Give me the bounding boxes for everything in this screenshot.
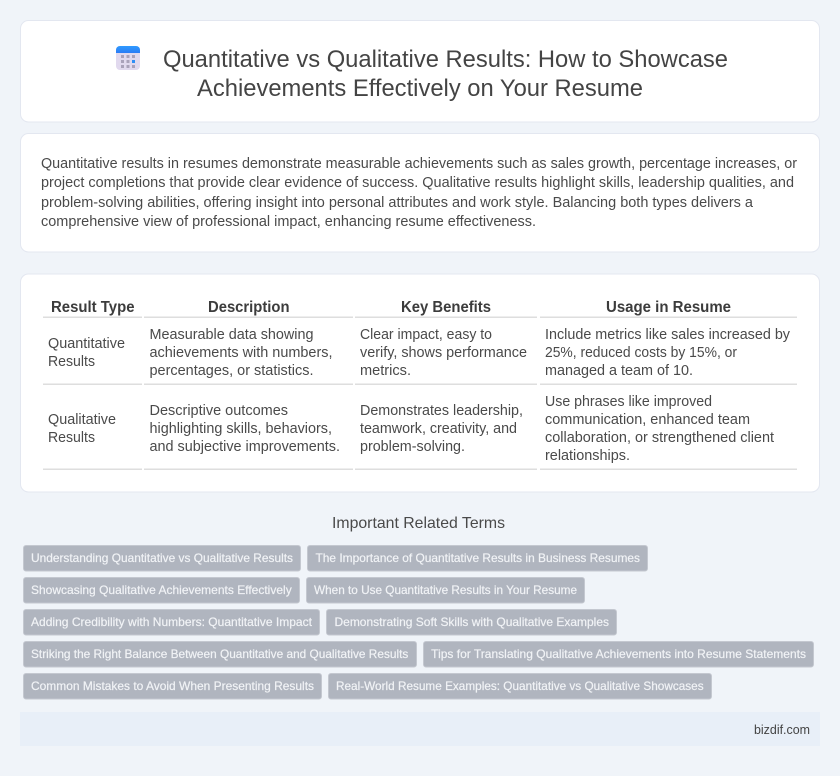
tag: The Importance of Quantitative Results in Business Resumes	[316, 551, 640, 565]
tag	[308, 546, 648, 571]
table row: quantitative results	[48, 327, 791, 379]
table row: quantitative results: Clear impact, easy to	[360, 327, 492, 343]
tag: Adding Credibility with Numbers: Quantitative Impact	[31, 615, 313, 629]
panel: introduction	[20, 134, 820, 252]
table row: qualitative results: problem-solving.	[360, 439, 465, 455]
table row: qualitative results: communication, enhanced team	[545, 412, 750, 428]
table row: quantitative results: metrics.	[360, 363, 411, 379]
table header row	[51, 299, 731, 316]
intro paragraph: comprehensive view of professional impact, enhancing resume effectiveness.	[41, 214, 536, 230]
tag	[24, 642, 416, 667]
table header row: Usage in Resume	[606, 299, 731, 316]
tag	[24, 610, 320, 635]
tag	[24, 546, 300, 571]
table row: quantitative results: Quantitative	[48, 336, 125, 352]
table header row: Key Benefits	[401, 299, 491, 316]
intro paragraph: Quantitative results in resumes demonstrate measurable achievements such as sales growth, percentage increases, or	[41, 156, 797, 172]
panel: header	[20, 20, 820, 122]
footer: bizdif.com	[754, 722, 810, 737]
title: Achievements Effectively on Your Resume	[197, 75, 643, 102]
tag: Real-World Resume Examples: Quantitative vs Qualitative Showcases	[336, 679, 704, 693]
icon: calendar	[116, 46, 140, 70]
table row: qualitative results: Qualitative	[48, 412, 116, 428]
tag: Demonstrating Soft Skills with Qualitative Examples	[334, 615, 609, 629]
panel: comparison table	[20, 274, 820, 492]
table row: quantitative results: Measurable data showing	[150, 327, 314, 343]
table row: qualitative results: collaboration, or strengthened client	[545, 430, 774, 446]
tag: Common Mistakes to Avoid When Presenting Results	[31, 679, 314, 693]
table row: qualitative results: and subjective improvements.	[150, 439, 340, 455]
tag	[326, 610, 616, 635]
footer	[20, 712, 820, 746]
table row: quantitative results: Results	[48, 354, 95, 370]
table header row: Result Type	[51, 299, 135, 316]
tag	[306, 578, 584, 603]
table row: qualitative results: Use phrases like improved	[545, 394, 712, 410]
related term tags	[24, 546, 814, 699]
title	[163, 46, 728, 102]
intro paragraph	[41, 156, 797, 230]
table row: qualitative results: Results	[48, 430, 95, 446]
intro paragraph: problem-solving abilities, offering insight into personal attributes and work style. Balancing both types delivers a	[41, 195, 753, 211]
title: Quantitative vs Qualitative Results: How to Showcase	[163, 46, 728, 73]
table row: qualitative results: Demonstrates leadership,	[360, 403, 523, 419]
tag	[328, 674, 712, 699]
table row: quantitative results: verify, shows performance	[360, 345, 527, 361]
tag: Striking the Right Balance Between Quantitative and Qualitative Results	[31, 647, 408, 661]
tag: Showcasing Qualitative Achievements Effectively	[31, 583, 292, 597]
tag: When to Use Quantitative Results in Your Resume	[314, 583, 577, 597]
table row: qualitative results	[48, 394, 774, 464]
tag	[424, 642, 814, 667]
table row: quantitative results: Include metrics like sales increased by	[545, 327, 791, 343]
table row: qualitative results: teamwork, creativity, and	[360, 421, 517, 437]
table row: quantitative results: percentages, or statistics.	[150, 363, 314, 379]
heading: important related terms: Important Related Terms	[332, 515, 505, 532]
table row: qualitative results: relationships.	[545, 448, 630, 464]
tag	[24, 578, 300, 603]
tag: Understanding Quantitative vs Qualitative Results	[31, 551, 293, 565]
table row: quantitative results: 25%, reduced costs by 15%, or	[545, 345, 737, 361]
table row: qualitative results: highlighting skills, behaviors,	[150, 421, 332, 437]
table row: quantitative results: achievements with numbers,	[150, 345, 332, 361]
table header row: Description	[208, 299, 290, 316]
table row: qualitative results: Descriptive outcomes	[150, 403, 288, 419]
intro paragraph: project completions that provide clear evidence of success. Qualitative results highlight skills, leadership qualities, and	[41, 175, 794, 191]
tag	[24, 674, 322, 699]
tag: Tips for Translating Qualitative Achievements into Resume Statements	[431, 647, 806, 661]
table row: quantitative results: managed a team of 10.	[545, 363, 693, 379]
